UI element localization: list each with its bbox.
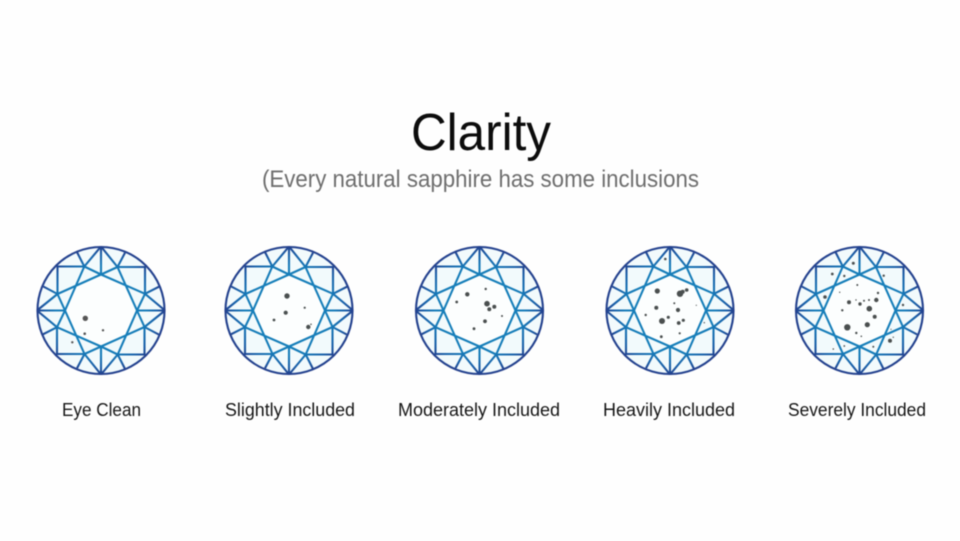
label: slightly included: Slightly Included — [225, 400, 355, 420]
diamond: slightly included — [225, 246, 353, 374]
diamond: eye clean — [37, 246, 165, 374]
label: heavily included: Heavily Included — [603, 400, 735, 420]
label: severely included: Severely Included — [788, 400, 926, 420]
title: Clarity — [411, 104, 551, 162]
diamond: moderately included — [416, 246, 544, 374]
diamond: heavily included — [606, 246, 734, 374]
label: moderately included: Moderately Included — [398, 400, 560, 420]
label: eye clean: Eye Clean — [62, 400, 141, 420]
diamond: severely included — [796, 246, 924, 374]
subtitle: (Every natural sapphire has some inclusions — [262, 166, 699, 193]
